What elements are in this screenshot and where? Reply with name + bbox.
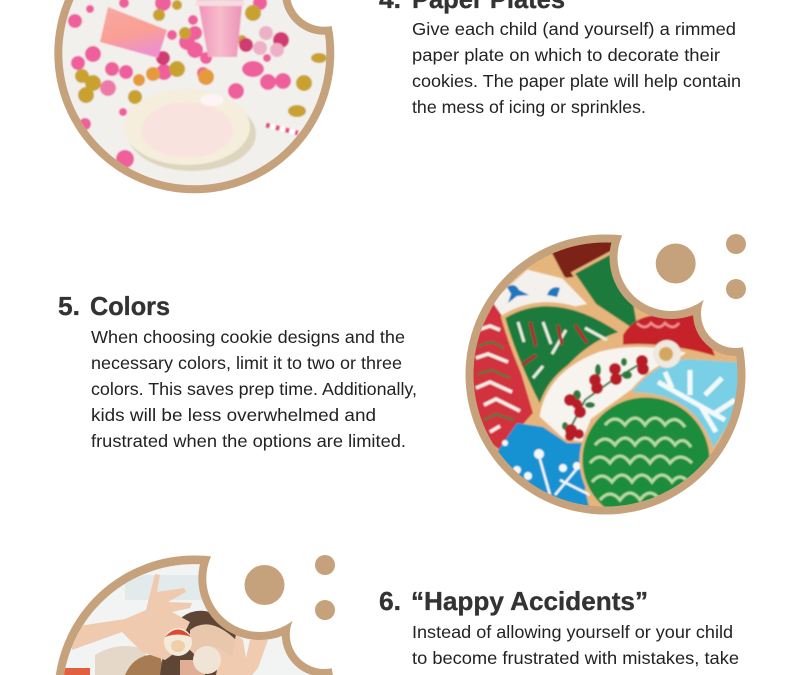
step 5 text <box>91 327 417 451</box>
crumbs <box>244 555 335 620</box>
green feathered cookie <box>578 396 710 506</box>
step 5 heading <box>58 291 170 321</box>
blond hair <box>95 646 150 675</box>
cup lying down <box>100 7 167 58</box>
step 5 text: kids will be less overwhelmed and <box>91 405 376 425</box>
red sweater <box>64 668 90 675</box>
step 4 text: cookies. The paper plate will help contain <box>412 71 741 91</box>
top-left white cookie <box>488 269 588 316</box>
step 5 text: frustrated when the options are limited. <box>91 431 406 451</box>
step 4 text <box>412 19 741 117</box>
red cookie top right <box>623 315 715 356</box>
face and hair <box>160 611 240 675</box>
white berry cookie <box>538 345 690 443</box>
cookie photo: happy accidents <box>56 555 335 675</box>
blue cookie <box>497 423 590 510</box>
step 5 text: When choosing cookie designs and the <box>91 327 405 347</box>
cookie photo: paper plates <box>54 0 334 194</box>
step 5 text: colors. This saves prep time. Additionally, <box>91 379 417 399</box>
step 6 heading: “Happy Accidents” <box>411 586 648 616</box>
red cookie left <box>474 304 534 450</box>
step 5 text: necessary colors, limit it to two or three <box>91 353 402 373</box>
dark cookie <box>552 242 612 278</box>
step 6 text <box>412 622 739 668</box>
left arm and hand <box>72 574 192 660</box>
step 6 text: to become frustrated with mistakes, take <box>412 648 739 668</box>
step 6 text: Instead of allowing yourself or your child <box>412 622 733 642</box>
gear icing <box>653 340 681 368</box>
standing cups <box>196 0 244 57</box>
top green cookie <box>570 250 637 327</box>
step 4 text: Give each child (and yourself) a rimmed <box>412 19 736 39</box>
cream cookie <box>193 646 221 674</box>
step 5 heading: 5. <box>58 291 80 321</box>
striped straw <box>266 125 298 133</box>
paper plate <box>124 89 256 171</box>
step 4 text: paper plate on which to decorate their <box>412 45 720 65</box>
step 6 heading: 6. <box>379 586 401 616</box>
step 5 heading: Colors <box>90 291 170 321</box>
snowflake cookie <box>630 358 745 450</box>
santa cookie <box>164 628 192 656</box>
green marbled cookie <box>503 304 623 408</box>
right hand <box>213 634 268 675</box>
crumbs <box>656 234 746 299</box>
cookie photo: colors <box>466 234 746 514</box>
soft background <box>125 575 205 600</box>
step 4 text: the mess of icing or sprinkles. <box>412 97 646 117</box>
confetti <box>68 0 291 168</box>
